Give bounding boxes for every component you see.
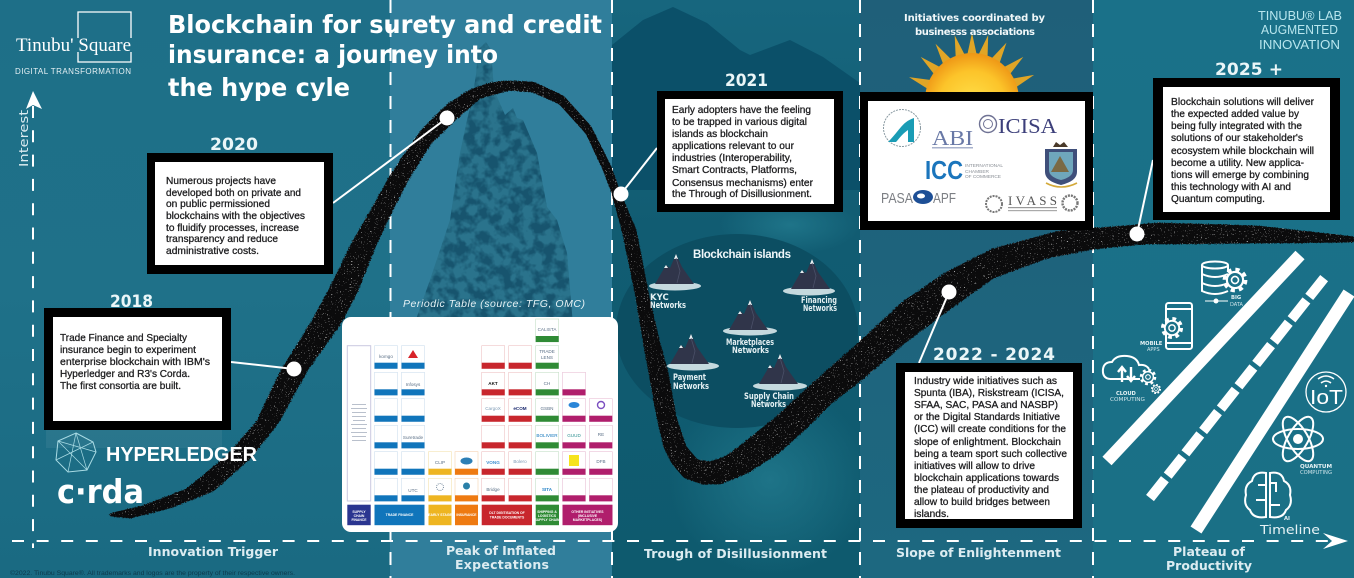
- callout: 2020: to fluidify processes, increase: [166, 222, 299, 234]
- logo: Tinubu Square: Tinubu' Square: [16, 36, 131, 56]
- label: Tinubu Lab: AUGMENTED: [1261, 22, 1338, 37]
- island: supply chain: Networks: [751, 400, 786, 410]
- diagram: blockchain islands: Blockchain islands: [693, 249, 791, 261]
- connector lines: [231, 118, 1153, 369]
- callout: 2022 - 2024: (ICC) will create conditions for the: [914, 423, 1066, 435]
- icon: big data: DATA: [1230, 302, 1243, 308]
- callout: 2018: Hyperledger and R3's Corda.: [60, 368, 190, 380]
- island: payment: [667, 334, 719, 392]
- logo: PASA APF: [881, 190, 956, 207]
- logo: ICISA: ICISA: [998, 114, 1058, 138]
- category bars: SHIPPING &: [537, 510, 557, 514]
- cells: other initiatives: [562, 372, 612, 501]
- category bars: EARLY STAGE: [428, 513, 452, 517]
- phase label: slope of enlightenment: Slope of Enlightenment: [896, 545, 1061, 560]
- icon: big data: [1202, 262, 1245, 308]
- curve markers: [286, 110, 1144, 376]
- illustration: island sea: [616, 234, 858, 428]
- illustration: mountains: [612, 7, 860, 190]
- category bars: SUPPLY: [352, 510, 366, 514]
- callout: 2022 - 2024: SFAA, SAC, PASA and NASBP): [914, 399, 1058, 411]
- logo: IVASS: IVASS: [1008, 193, 1057, 208]
- icon: cloud computing: COMPUTING: [1110, 397, 1145, 403]
- callout: 2021: 2021: [725, 71, 768, 91]
- cells: trade finance: Infosys: [406, 382, 421, 387]
- cells: digitisation of trade documents: AKT: [488, 381, 498, 386]
- cells: digitisation of trade documents: eCOM: [513, 406, 527, 411]
- category bars: [347, 505, 612, 525]
- heading: initiatives coordinated: Initiatives coordinated by: [904, 13, 1045, 24]
- callout: 2022 - 2024: being a team sport such collective: [914, 448, 1067, 460]
- icon: AI brain: [1245, 473, 1291, 522]
- logo: PASA APF: APF: [933, 190, 956, 207]
- callout: 2021: Smart Contracts, Platforms,: [672, 164, 797, 176]
- logo: ICISA: [980, 114, 1058, 138]
- hype cycle curve: [108, 82, 1354, 517]
- callout: 2020: developed both on private and: [166, 187, 301, 199]
- callout: 2025 +: become a utility. New applica-: [1171, 157, 1304, 169]
- cells: trade finance: UTC: [408, 488, 418, 493]
- phase label: innovation trigger: Innovation Trigger: [148, 544, 279, 559]
- callout: 2022 - 2024: slope of enlightment. Blockchain: [914, 436, 1061, 448]
- callout: 2025 +: 2025 +: [1215, 60, 1283, 80]
- icon: quantum computing: COMPUTING: [1300, 470, 1332, 476]
- logo: Hyperledger: HYPERLEDGER: [106, 444, 258, 466]
- callout: 2022 - 2024: blockchain applications towards: [914, 472, 1059, 484]
- cells: shipping and supply chain: GSBN: [540, 406, 554, 411]
- callout: 2025 +: this technology with AI and: [1171, 181, 1291, 193]
- cells: digitisation of trade documents: CargoX: [485, 406, 501, 411]
- callout: 2022 - 2024: allow to build bridges between: [914, 496, 1050, 508]
- callout: 2021: applications relevant to our: [672, 140, 794, 152]
- label: Tinubu Lab: [1258, 8, 1342, 52]
- logo: Corda: c·rda: [57, 472, 144, 511]
- callout: 2025 +: solutions of our stakeholder's: [1171, 132, 1303, 144]
- logo: IVASS: [986, 193, 1078, 212]
- cells: early stage and insurance: [428, 452, 478, 501]
- callout: 2020: [147, 135, 333, 274]
- icon: mobile apps: [1140, 303, 1192, 353]
- island: supply chain: Supply Chain: [744, 392, 794, 402]
- island: marketplaces: Marketplaces: [726, 338, 774, 348]
- island: financing: [783, 259, 837, 314]
- title: [168, 10, 602, 102]
- icon: cloud computing: [1103, 356, 1160, 403]
- category bars: DLT DIGITISATION OF: [489, 511, 525, 515]
- callout: 2020: 2020: [210, 135, 258, 155]
- phase label: plateau of productivity: Productivity: [1166, 558, 1252, 573]
- logo: Tinubu Square: [15, 12, 131, 76]
- logo: Hyperledger: [46, 430, 258, 472]
- callout: 2022 - 2024: the plateau of productivity and: [914, 484, 1049, 496]
- callout: 2025 +: ecosystem while blockchain will: [1171, 145, 1314, 157]
- panel: innovation trigger background: [0, 0, 390, 578]
- logo: Tinubu Square: DIGITAL TRANSFORMATION: [15, 67, 131, 76]
- callout: 2021: islands as blockchain: [672, 128, 768, 140]
- cells: early stage and insurance: CLIP: [435, 460, 445, 465]
- island: KYC: [649, 254, 701, 311]
- logo: ICC: OF COMMERCE: [965, 174, 1001, 180]
- callout: 2020: Numerous projects have: [166, 175, 276, 187]
- phase label: peak of inflated expectations: Peak of Inflated: [446, 543, 556, 558]
- phase label: peak of inflated expectations: [446, 543, 556, 572]
- panel: trough of disillusionment background: [612, 0, 870, 578]
- title: the hype cyle: [168, 73, 350, 102]
- callout: 2025 +: the expected added value by: [1171, 108, 1300, 120]
- island: marketplaces: [723, 300, 777, 356]
- callout: 2018: enterprise blockchain with IBM's: [60, 356, 210, 368]
- panel: peak of inflated expectations background: [390, 0, 612, 578]
- phase label: trough of disillusionment: Trough of Disillusionment: [644, 546, 827, 561]
- label: Tinubu Lab: INNOVATION: [1259, 37, 1340, 52]
- category bars: (INCLUSIVE: [578, 514, 598, 518]
- island: payment: Payment: [673, 373, 706, 383]
- island: financing: Financing: [801, 296, 837, 306]
- callout: 2020: transparency and reduce: [166, 233, 278, 245]
- timeline axis arrow: [12, 522, 1348, 549]
- cells: shipping and supply chain: CALISTA: [538, 327, 557, 332]
- icon: cloud computing: CLOUD: [1116, 391, 1137, 397]
- callout: 2022 - 2024: islands.: [914, 508, 949, 520]
- icon: big data: BIG: [1231, 295, 1241, 301]
- category bars: INSURANCE: [456, 513, 477, 517]
- heading: initiatives coordinated: [904, 13, 1045, 38]
- cells: digitisation of trade documents: [482, 346, 532, 501]
- callout: 2021: Early adopters have the feeling: [672, 104, 811, 116]
- callout: 2025 +: being fully integrated with the: [1171, 120, 1302, 132]
- island: marketplaces: Networks: [732, 346, 769, 356]
- island: financing: Networks: [803, 304, 837, 314]
- icon: mobile apps: APPS: [1147, 347, 1160, 353]
- cells: shipping and supply chain: [536, 319, 559, 501]
- logo: ICC: CHAMBER: [965, 169, 990, 175]
- category bars: SUPPLY CHAIN: [535, 518, 560, 522]
- callout: 2025 +: Blockchain solutions will deliver: [1171, 96, 1314, 108]
- callout: 2018: [44, 292, 231, 430]
- category bars: MARKETPLACES): [573, 518, 602, 522]
- interest axis arrow: Interest: [17, 110, 31, 167]
- logo: ICC: INTERNATIONAL: [965, 163, 1003, 169]
- category bars: OTHER INITIATIVES: [571, 510, 604, 514]
- callout: 2022 - 2024: or the Digital Standards Initiative: [914, 411, 1060, 423]
- logo: ICC: [925, 155, 1003, 185]
- cells: other initiatives: GUUD: [567, 433, 581, 438]
- callout: 2025 +: [1153, 60, 1340, 220]
- callout: 2022 - 2024: 2022 - 2024: [933, 345, 1055, 365]
- illustration: rock spire: [414, 42, 573, 325]
- panel: plateau of productivity background: [1093, 0, 1354, 578]
- phase label: peak of inflated expectations: Expectations: [455, 557, 549, 572]
- icon: IoT: [1306, 372, 1346, 412]
- title: Blockchain for surety and credit: [168, 10, 602, 39]
- cells: shipping and supply chain: BOLIVIER: [536, 433, 558, 438]
- logo: ICC: ICC: [925, 155, 963, 185]
- category bars: FINANCE: [351, 518, 367, 522]
- copyright: ©2022. Tinubu Square®. All trademarks and logos are the property of their respective owners.: [10, 569, 295, 577]
- road illustration: [1107, 255, 1349, 530]
- description column: [347, 346, 371, 501]
- illustration: light on water: [720, 195, 860, 255]
- callout: 2025 +: tions will emerge by combining: [1171, 169, 1309, 181]
- vertical phase dividers: [390, 0, 1093, 578]
- callout: 2020: blockchains with the objectives: [166, 210, 305, 222]
- cells: digitisation of trade documents: Bolero: [513, 459, 527, 464]
- diagram: blockchain islands: [649, 249, 837, 410]
- cells: trade finance: [374, 346, 424, 501]
- cells: shipping and supply chain: LENS: [541, 355, 553, 360]
- logo: surety association: [884, 110, 920, 146]
- island: payment: Networks: [673, 382, 709, 392]
- island: KYC: KYC: [650, 293, 669, 303]
- logo: PASA APF: PASA: [881, 190, 913, 207]
- heading: initiatives coordinated: businesss associations: [915, 27, 1035, 38]
- category bars: TRADE FINANCE: [386, 513, 414, 517]
- logo: ABI: ABI: [932, 126, 973, 150]
- interest axis arrow: [17, 91, 42, 548]
- logo: crest: [1045, 142, 1077, 187]
- callout: 2018: The first consortia are built.: [60, 380, 181, 392]
- callout: 2025 +: Quantum computing.: [1171, 193, 1265, 205]
- category bars: LOGISTICS: [538, 514, 557, 518]
- heading: periodic table: Periodic Table (source: TFG, OMC): [403, 298, 585, 310]
- label: Tinubu Lab: TINUBU® LAB: [1258, 8, 1342, 23]
- phase label: plateau of productivity: Plateau of: [1173, 544, 1246, 559]
- cells: trade finance: Suretrade: [403, 435, 424, 440]
- cells: other initiatives: DFB: [596, 459, 606, 464]
- icon: sun: [907, 33, 1036, 147]
- callout: 2022 - 2024: Industry wide initiatives such as: [914, 375, 1057, 387]
- category bars: TRADE DOCUMENTS: [490, 516, 525, 520]
- icon: AI brain: AI: [1284, 516, 1290, 522]
- timeline axis arrow: Timeline: [1259, 522, 1320, 537]
- cells: digitisation of trade documents: VONG: [486, 460, 500, 465]
- cells: shipping and supply chain: SITA: [542, 487, 553, 492]
- callout: 2022 - 2024: [896, 345, 1082, 528]
- callout: 2022 - 2024: Spunta (IBA), Riskstream (ICISA,: [914, 387, 1064, 399]
- title: insurance: a journey into: [168, 40, 498, 69]
- callout: 2021: [657, 71, 843, 212]
- island: KYC: Networks: [650, 301, 686, 311]
- panel: periodic table: [342, 317, 618, 532]
- icon: IoT: IoT: [1310, 387, 1343, 409]
- cells: shipping and supply chain: CH: [544, 381, 550, 386]
- cells: other initiatives: RE: [598, 432, 604, 437]
- cells: trade finance: komgo: [379, 354, 393, 359]
- panel: association logos: [860, 92, 1093, 230]
- icon: quantum computing: QUANTUM: [1300, 464, 1332, 470]
- callout: 2018: insurance begin to experiment: [60, 344, 196, 356]
- callout: 2020: administrative costs.: [166, 245, 259, 257]
- cells: shipping and supply chain: TRADE: [539, 349, 555, 354]
- callout: 2021: to be trapped in various digital: [672, 116, 807, 128]
- icon: quantum computing: [1273, 412, 1332, 476]
- callout: 2021: industries (Interoperability,: [672, 152, 792, 164]
- panel: slope of enlightenment background: [860, 0, 1093, 578]
- phase label: plateau of productivity: [1166, 544, 1252, 573]
- callout: 2021: Consensus mechanisms) enter: [672, 177, 813, 189]
- callout: 2021: the Through of Disillusionment.: [672, 188, 812, 200]
- callout: 2018: 2018: [110, 292, 153, 312]
- callout: 2022 - 2024: initiatives will allow to drive: [914, 460, 1035, 472]
- callout: 2018: Trade Finance and Specialty: [60, 332, 188, 344]
- icon: mobile apps: MOBILE: [1140, 341, 1163, 347]
- island: supply chain: [744, 354, 807, 410]
- category bars: CHAIN: [354, 514, 365, 518]
- callout: 2020: on public permissioned: [166, 198, 270, 210]
- cells: digitisation of trade documents: Bridge: [486, 487, 500, 492]
